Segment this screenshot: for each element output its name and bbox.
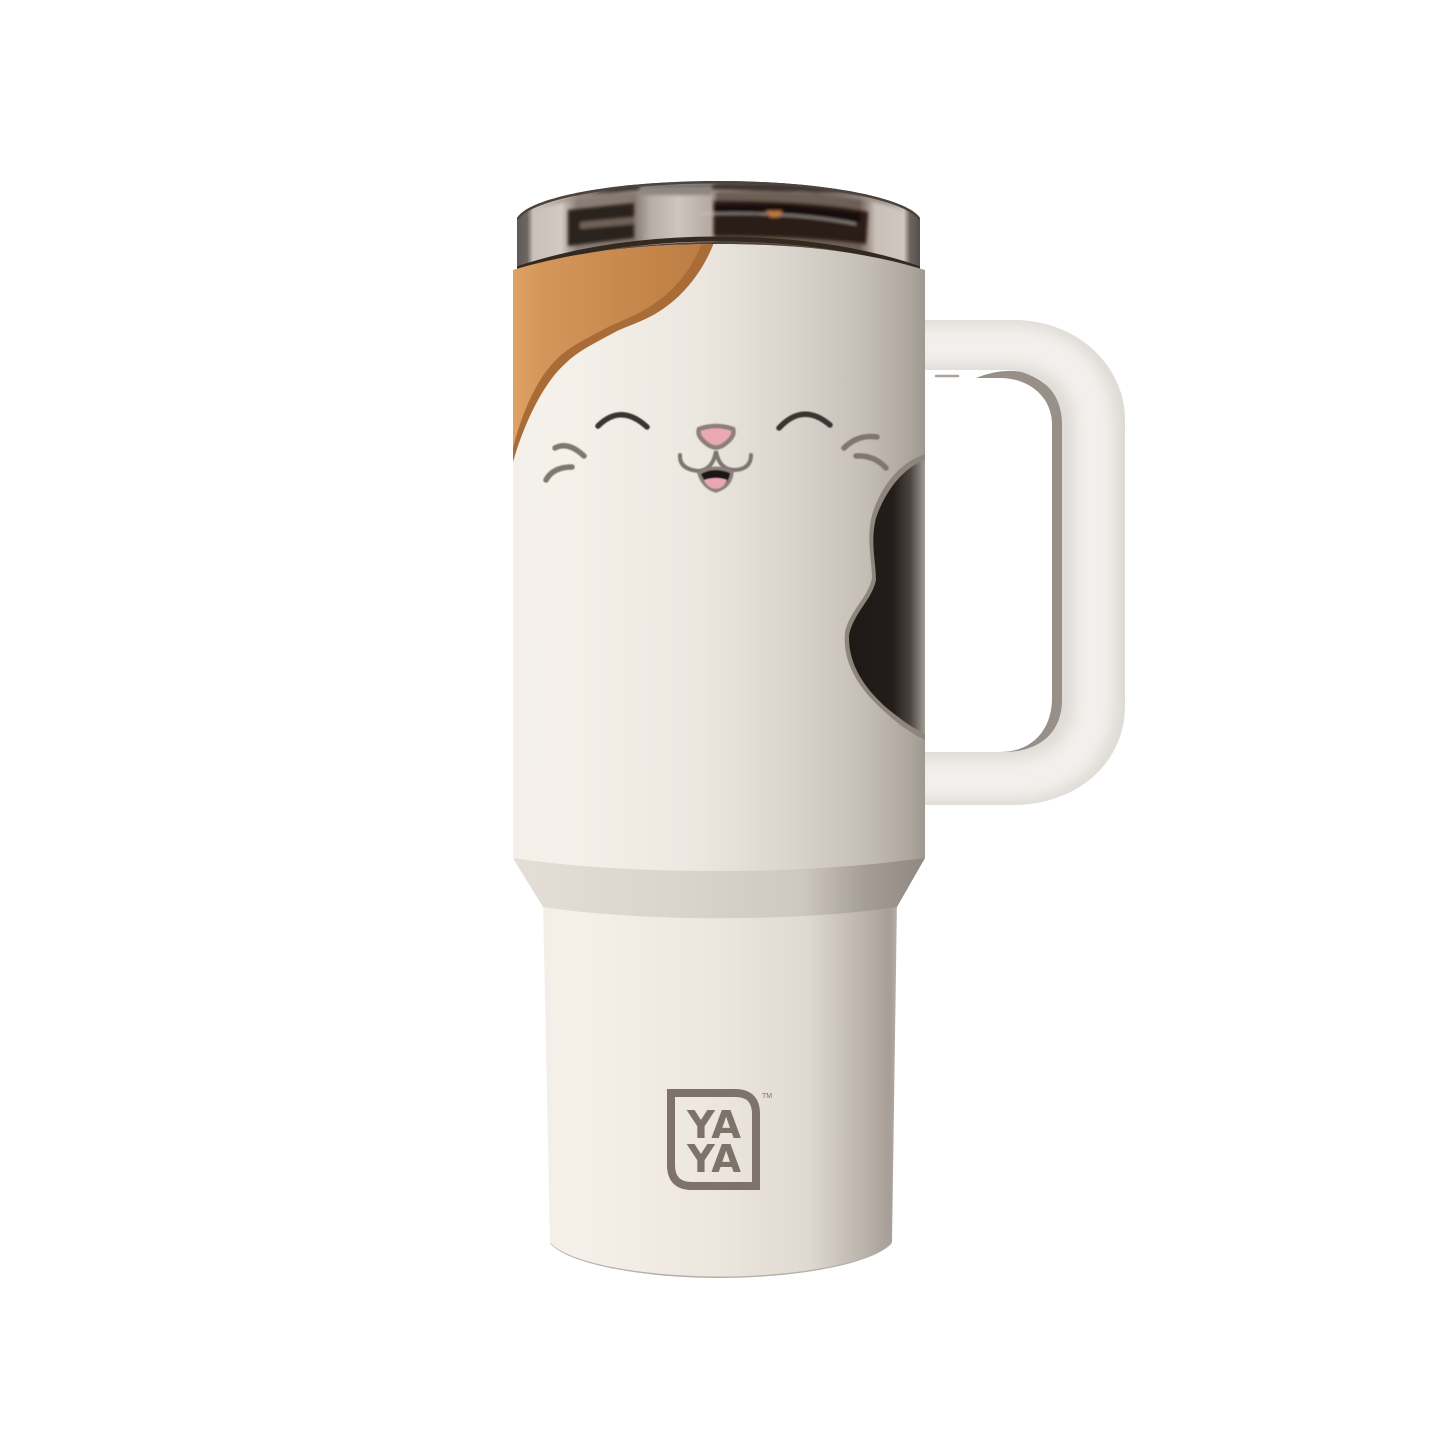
handle inner shadow strip — [976, 371, 1064, 756]
handle body — [915, 315, 1130, 810]
right whiskers — [844, 436, 886, 468]
left whiskers — [546, 446, 584, 480]
logo letters: YA — [686, 1103, 742, 1147]
cat face — [546, 414, 886, 491]
left eye — [598, 415, 647, 427]
calico orange patch — [505, 240, 930, 742]
open mouth — [699, 468, 732, 491]
infographic: cat face tumbler product image — [513, 181, 1125, 1278]
upper body — [513, 244, 925, 871]
shoulder band — [513, 850, 925, 918]
logo: YAYA — [671, 1093, 772, 1186]
tumbler body — [505, 240, 930, 1278]
logo frame — [671, 1093, 756, 1186]
handle underside ghost mark — [936, 375, 958, 377]
mouth — [680, 451, 751, 471]
base shadow edge — [550, 1240, 892, 1278]
tumbler lid — [517, 181, 920, 275]
logo: YAYA: YA — [686, 1137, 742, 1181]
trademark: TM — [762, 1093, 772, 1100]
nose — [698, 426, 734, 448]
right eye — [779, 414, 830, 428]
lid bottom edge — [517, 239, 920, 269]
lid top rim — [517, 182, 920, 219]
base — [543, 900, 897, 1276]
handle — [915, 315, 1130, 810]
lid details, soft reflections — [530, 184, 906, 246]
calico dark patch — [845, 453, 930, 742]
